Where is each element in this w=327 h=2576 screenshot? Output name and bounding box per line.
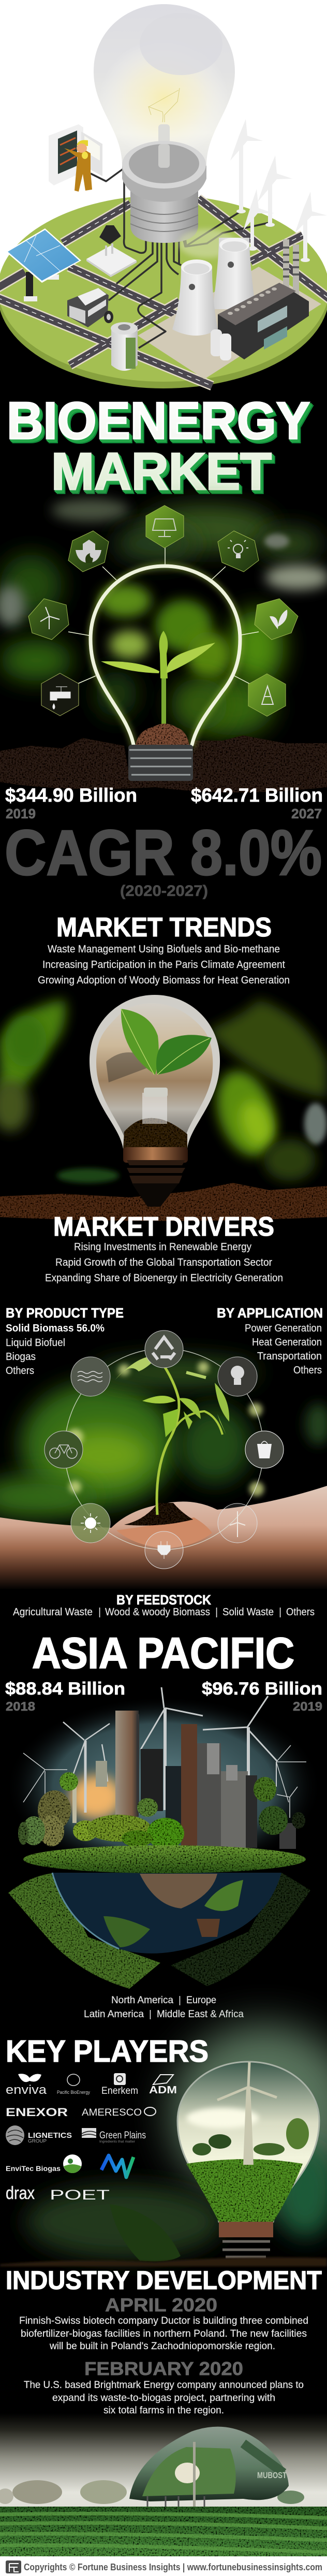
generator xyxy=(67,288,113,327)
title: BIOENERGY MARKET: MARKET xyxy=(52,444,273,502)
bulb socket and screw base xyxy=(122,141,206,243)
wind turbines xyxy=(230,119,327,262)
title: BIOENERGY MARKET: BIOENERGY xyxy=(7,392,310,450)
electrical cabinet and worker xyxy=(49,124,102,192)
other regions list: North America xyxy=(111,1995,173,2006)
icon: bicycle xyxy=(44,1431,83,1468)
stat: Asia Pacific 2018 xyxy=(5,1679,125,1714)
ground disc xyxy=(0,195,327,388)
development: April 2020: Finnish-Swiss biotech company Ductor is building three combined xyxy=(19,2315,308,2326)
icon: plug xyxy=(145,1531,183,1569)
panel: segmentation by product type: Liquid Biofuel xyxy=(6,1337,65,1349)
lightbulb with landscape xyxy=(177,2062,319,2222)
trees and shrubs xyxy=(18,1772,305,1849)
panel: key players background xyxy=(0,2025,327,2266)
other regions list: Middle East & Africa xyxy=(157,2009,244,2020)
heading: key players: KEY PLAYERS xyxy=(6,2034,209,2068)
logo: EnviTec Biogas xyxy=(6,2154,82,2173)
development: February 2020: The U.S. based Brightmark Energy company announced plans to xyxy=(24,2380,304,2391)
panel: segmentation by product type: Solid Biomass 56.0% xyxy=(6,1323,105,1334)
panel: segmentation by application: BY APPLICATION xyxy=(217,1305,323,1321)
logo: enviva xyxy=(6,2074,47,2097)
company logos xyxy=(6,2073,177,2203)
stat: Asia Pacific 2018: 2018 xyxy=(6,1700,35,1714)
chimneys xyxy=(283,239,299,296)
main bio pod: MUBOST xyxy=(257,2470,287,2480)
panel: segmentation by application xyxy=(217,1305,323,1376)
stat: Asia Pacific 2019: $96.76 Billion xyxy=(202,1679,322,1699)
logo: MVV xyxy=(101,2155,133,2177)
lightbulb xyxy=(90,995,220,1207)
driver list: Rising Investments in Renewable Energy xyxy=(74,1241,251,1253)
logo: Enerkem xyxy=(101,2073,138,2096)
road network xyxy=(0,198,327,386)
icon: waves xyxy=(71,1357,110,1396)
hexagon: light bulb xyxy=(218,531,259,572)
soil in palms xyxy=(124,1503,193,1526)
other regions list xyxy=(84,1995,244,2020)
title: BIOENERGY MARKET: BIOENERGY xyxy=(10,396,313,454)
stat: Asia Pacific 2019: 2019 xyxy=(293,1700,322,1714)
panel: green city on globe xyxy=(6,1687,321,1989)
icon: Fortune Business Insights logo xyxy=(6,2560,21,2573)
panel: segmentation by product type: Biogas xyxy=(6,1351,36,1363)
blurred green bokeh background xyxy=(0,499,327,735)
panel: market trends xyxy=(38,913,290,986)
trend list xyxy=(38,944,290,986)
soil mound xyxy=(136,723,189,745)
logo: ENEXOR: ENEXOR xyxy=(6,2106,68,2119)
title: BIOENERGY MARKET: BIOENERGY xyxy=(9,395,312,453)
panel: segmentation by feedstock: | xyxy=(279,1607,281,1618)
logo: Lignetics Group: GROUP xyxy=(28,2138,47,2144)
logo: Pacific BioEnergy: Pacific BioEnergy xyxy=(57,2090,90,2095)
cooling towers xyxy=(172,238,256,336)
bottom farm photo xyxy=(0,2413,327,2556)
blurred foliage background xyxy=(0,1000,327,1183)
solar panel xyxy=(6,228,81,301)
panel: segmentation by product type: Others xyxy=(6,1365,34,1377)
panel: segmentation by feedstock: Solid Waste xyxy=(222,1607,274,1618)
foliage under globe xyxy=(8,1873,160,1989)
trend list: Growing Adoption of Woody Biomass for Heat Generation xyxy=(38,975,290,986)
grass disc xyxy=(23,1845,306,1873)
concrete plant yard xyxy=(138,267,321,379)
logo: Lignetics Group xyxy=(6,2125,72,2145)
wind turbines xyxy=(23,1687,306,1818)
trend list: Increasing Participation in the Paris Climate Agreement xyxy=(42,959,285,971)
metal lamp base xyxy=(128,745,193,781)
panel: segmentation by product type xyxy=(6,1305,124,1377)
dark leaf xyxy=(110,2204,181,2261)
stat: 2027 market value: 2027 xyxy=(291,806,322,821)
panel: segmentation by application: Transportation xyxy=(257,1351,322,1362)
stat: 2019 market value xyxy=(5,785,137,821)
soil strip xyxy=(0,1183,327,1221)
icon: recycle xyxy=(145,1330,183,1368)
hexagon icons with connectors xyxy=(28,505,298,716)
heading: market trends: MARKET TRENDS xyxy=(56,913,272,943)
logo: EnviTec Biogas: EnviTec Biogas xyxy=(6,2164,61,2173)
other regions list: Europe xyxy=(186,1995,216,2006)
stat: 2027 market value: $642.71 Billion xyxy=(191,785,323,806)
driver list: Expanding Share of Bioenergy in Electricity Generation xyxy=(45,1272,283,1284)
logo: Green Plains: Ingredients that matter xyxy=(99,2140,135,2144)
development: February 2020 xyxy=(24,2358,304,2416)
development: February 2020: six total farms in the region. xyxy=(103,2405,224,2416)
stat: 2027 market value xyxy=(191,785,323,821)
bulb screw base xyxy=(219,2222,273,2257)
development: February 2020: expand its waste-to-biogas project, partnering with xyxy=(52,2393,275,2404)
panel: segmentation by feedstock: Agricultural Waste xyxy=(13,1607,93,1618)
logo: AMERESCO: AMERESCO xyxy=(82,2107,142,2118)
sunset glow xyxy=(70,1775,122,1819)
bulb glass xyxy=(94,4,235,168)
main bio pod xyxy=(129,2427,289,2509)
panel: industry development xyxy=(6,2266,322,2416)
sky xyxy=(0,2413,327,2512)
seedling xyxy=(115,1348,229,1515)
other regions list: | xyxy=(149,2009,152,2020)
hexagon: gas rig xyxy=(248,674,286,716)
stat: Asia Pacific 2019 xyxy=(202,1679,322,1714)
panel: segmentation by application: Heat Generation xyxy=(252,1337,322,1348)
logo: Enerkem: Enerkem xyxy=(101,2086,138,2096)
panel: hands holding plant photo xyxy=(0,1330,327,1589)
icon: bucket xyxy=(245,1431,284,1468)
planet hemisphere xyxy=(52,1873,281,1953)
power cables xyxy=(91,169,269,348)
logo: Green Plains: Green Plains xyxy=(99,2130,146,2141)
title: BIOENERGY MARKET: MARKET xyxy=(53,445,274,503)
other regions list: Latin America xyxy=(84,2009,144,2020)
logo: enviva: enviva xyxy=(6,2083,47,2097)
bulb leaves xyxy=(121,1009,212,1075)
plug and socket xyxy=(86,225,137,277)
driver list: Rapid Growth of the Global Transportation Sector xyxy=(55,1257,272,1268)
CAGR callout: (2020-2027) xyxy=(120,882,208,900)
panel: segmentation by feedstock: BY FEEDSTOCK xyxy=(116,1592,211,1608)
logo: POET: POET xyxy=(50,2187,110,2203)
green bokeh background xyxy=(0,1358,327,1517)
panel: segmentation by feedstock: Others xyxy=(286,1607,315,1618)
soil foreground xyxy=(0,735,327,792)
hexagon: solar panel xyxy=(146,505,184,548)
panel: market drivers xyxy=(45,1212,283,1284)
panel: segmentation by feedstock: | xyxy=(215,1607,218,1618)
other regions list: | xyxy=(179,1995,181,2006)
title: BIOENERGY MARKET: MARKET xyxy=(51,443,272,501)
panel: segmentation by feedstock: | xyxy=(98,1607,101,1618)
icon: sun xyxy=(71,1503,110,1543)
panel: segmentation by feedstock xyxy=(13,1592,315,1618)
footer: copyright bar xyxy=(0,2556,327,2576)
trend list: Waste Management Using Biofuels and Bio-methane xyxy=(48,944,280,955)
hexagon: wind turbines xyxy=(28,599,69,640)
power plant building xyxy=(218,283,309,359)
title: BIOENERGY MARKET xyxy=(7,392,313,504)
glowing bulb outline xyxy=(91,566,240,745)
hands and arms xyxy=(0,1486,327,1589)
development: April 2020 xyxy=(19,2294,308,2352)
hexagon: biomass house fire xyxy=(68,531,109,572)
panel: lightbulb with leaves photo xyxy=(0,995,327,1221)
development: April 2020: biofertilizer-biogas facilities in northern Poland. The new facilities xyxy=(21,2328,307,2339)
panel: segmentation by application: Power Generation xyxy=(245,1323,322,1334)
hexagon: water tap xyxy=(41,673,79,716)
crop field xyxy=(0,2507,327,2556)
blurred glow xyxy=(171,2025,327,2201)
title: BIOENERGY MARKET: MARKET xyxy=(54,446,275,504)
development: April 2020: will be built in Poland's Zachodniopomorskie region. xyxy=(49,2341,275,2352)
icon: wind turbine xyxy=(218,1503,257,1543)
development: February 2020: FEBRUARY 2020 xyxy=(84,2358,243,2379)
panel: segmentation by feedstock: Wood & woody Biomass xyxy=(105,1607,210,1618)
regional heading: Asia Pacific: ASIA PACIFIC xyxy=(32,1629,294,1677)
hexagon: leaves xyxy=(255,599,298,640)
logo: Lignetics Group: LIGNETICS xyxy=(28,2131,72,2140)
title: BIOENERGY MARKET: BIOENERGY xyxy=(8,394,311,452)
logo: drax: drax xyxy=(6,2183,35,2203)
driver list xyxy=(45,1241,283,1284)
icon: bulb leaf xyxy=(218,1357,257,1396)
hero illustration: bulb on energy city disc xyxy=(0,0,327,388)
seedling xyxy=(101,631,215,725)
city buildings xyxy=(72,1711,296,1849)
soil line xyxy=(0,2257,327,2266)
logo: ADM: ADM xyxy=(149,2085,177,2096)
heading: market drivers: MARKET DRIVERS xyxy=(53,1212,274,1242)
panel: sprout in glowing bulb scene xyxy=(0,499,327,792)
development: April 2020: APRIL 2020 xyxy=(105,2294,217,2315)
steam xyxy=(179,229,235,258)
icon ring xyxy=(44,1330,284,1569)
battery xyxy=(111,322,138,371)
panel: segmentation by product type: BY PRODUCT TYPE xyxy=(6,1305,124,1321)
storage tanks xyxy=(211,329,231,360)
stat: Asia Pacific 2018: $88.84 Billion xyxy=(5,1679,125,1699)
stat: 2019 market value: 2019 xyxy=(6,806,36,821)
logo: Green Plains xyxy=(82,2128,146,2144)
stat: 2019 market value: $344.90 Billion xyxy=(5,785,137,806)
logo: Pacific BioEnergy xyxy=(57,2074,90,2095)
sky glow xyxy=(6,1696,321,1877)
distant pods xyxy=(0,2480,304,2504)
panel: segmentation by application: Others xyxy=(293,1365,322,1376)
logo: ADM xyxy=(149,2075,177,2096)
